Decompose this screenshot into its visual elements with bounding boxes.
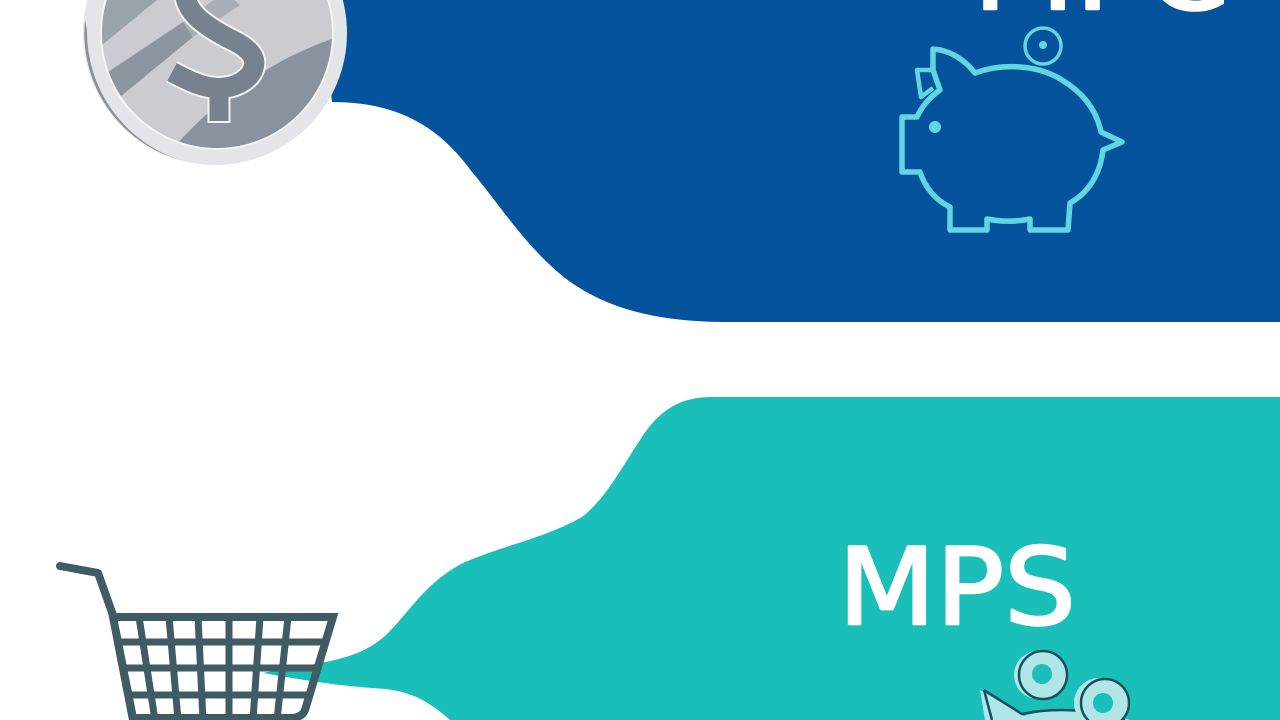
heading: MPS: MPS xyxy=(838,526,1076,649)
panel: MPC blue flow xyxy=(320,0,1280,322)
icon: shopping cart xyxy=(60,566,333,720)
icon: piggy bank with coins xyxy=(980,651,1130,720)
panel: MPS teal flow xyxy=(263,397,1280,720)
icon: piggy bank xyxy=(902,28,1122,230)
icon: dollar sign xyxy=(172,0,254,123)
icon: silver dollar coin xyxy=(83,0,347,165)
